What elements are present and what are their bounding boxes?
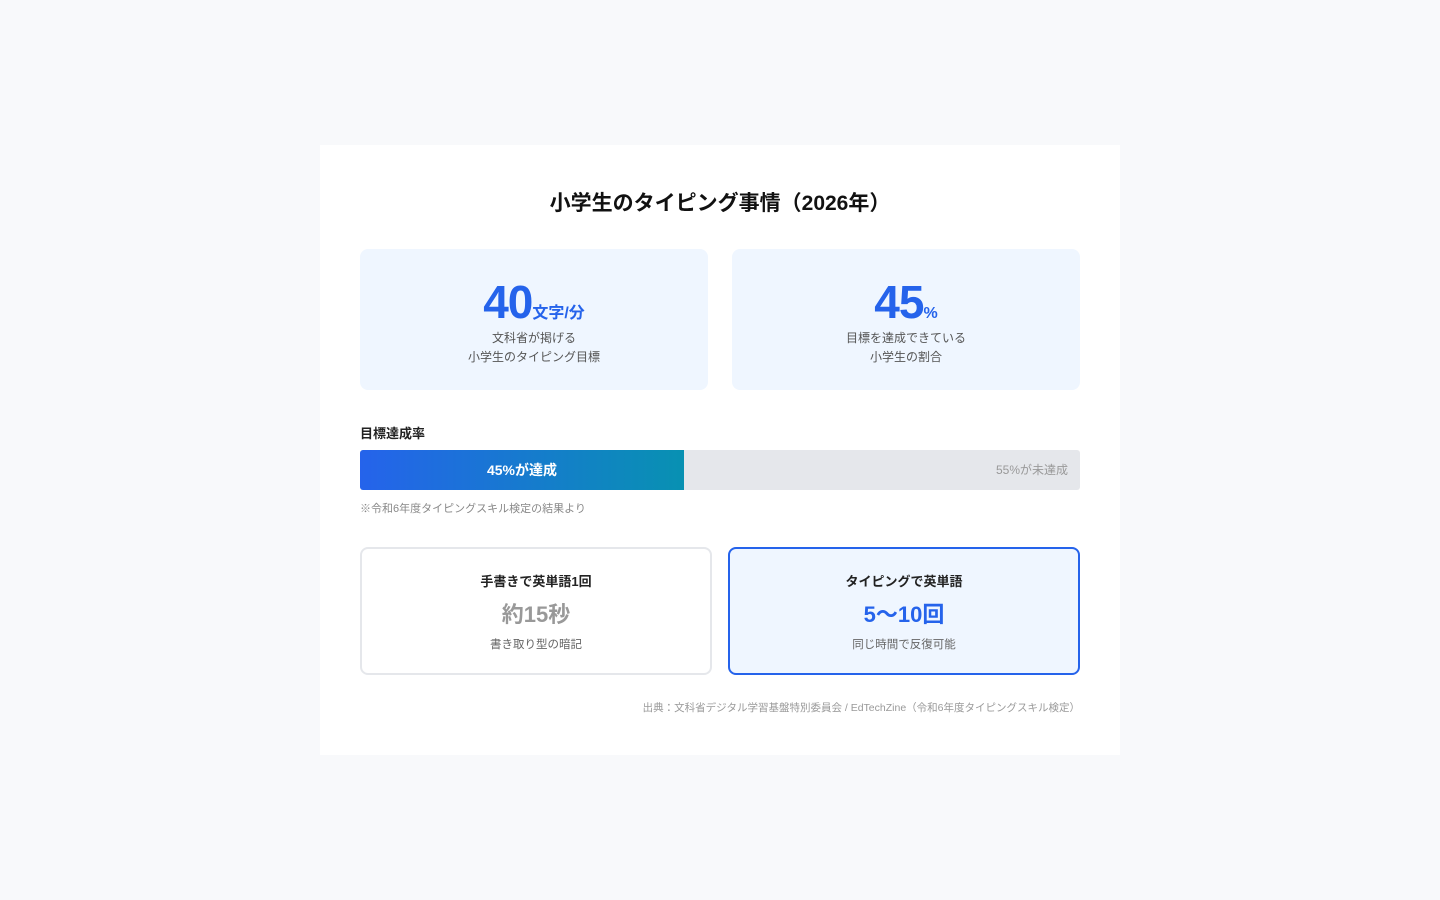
stat: 40 chars per minute: 文科省が掲げる [492, 331, 576, 345]
panel: typing [728, 547, 1080, 675]
stat: 40 chars per minute: 小学生のタイピング目標 [468, 350, 600, 364]
stat: 45 percent [732, 249, 1080, 390]
panel: typing: 5〜10回 [864, 602, 944, 627]
bar label: 目標達成率 [360, 426, 425, 441]
note: ※令和6年度タイピングスキル検定の結果より [360, 503, 586, 515]
bar: achieved: 45%が達成 [487, 462, 557, 478]
panel: handwriting: 書き取り型の暗記 [490, 639, 582, 651]
title: 小学生のタイピング事情（2026年） [550, 192, 890, 215]
stat: 45 percent: 目標を達成できている [846, 331, 966, 345]
panel: handwriting [360, 547, 712, 675]
panel: handwriting: 約15秒 [502, 602, 570, 627]
panel: typing: 同じ時間で反復可能 [852, 639, 956, 651]
bar: achieved [360, 450, 684, 490]
stat: 40 chars per minute [360, 249, 708, 390]
bar chart: achievement [360, 450, 1080, 490]
panel: handwriting: 手書きで英単語1回 [480, 574, 592, 589]
stat: 45 percent: 45% [874, 276, 938, 328]
stat: 45 percent: 小学生の割合 [870, 350, 942, 364]
bar label: not achieved: 55%が未達成 [996, 463, 1068, 477]
panel: typing: タイピングで英単語 [845, 574, 962, 589]
source: 出典：文科省デジタル学習基盤特別委員会 / EdTechZine（令和6年度タイピングスキル検定） [643, 702, 1080, 714]
stat: 40 chars per minute: 40文字/分 [483, 276, 585, 328]
panel: main card [320, 145, 1120, 755]
